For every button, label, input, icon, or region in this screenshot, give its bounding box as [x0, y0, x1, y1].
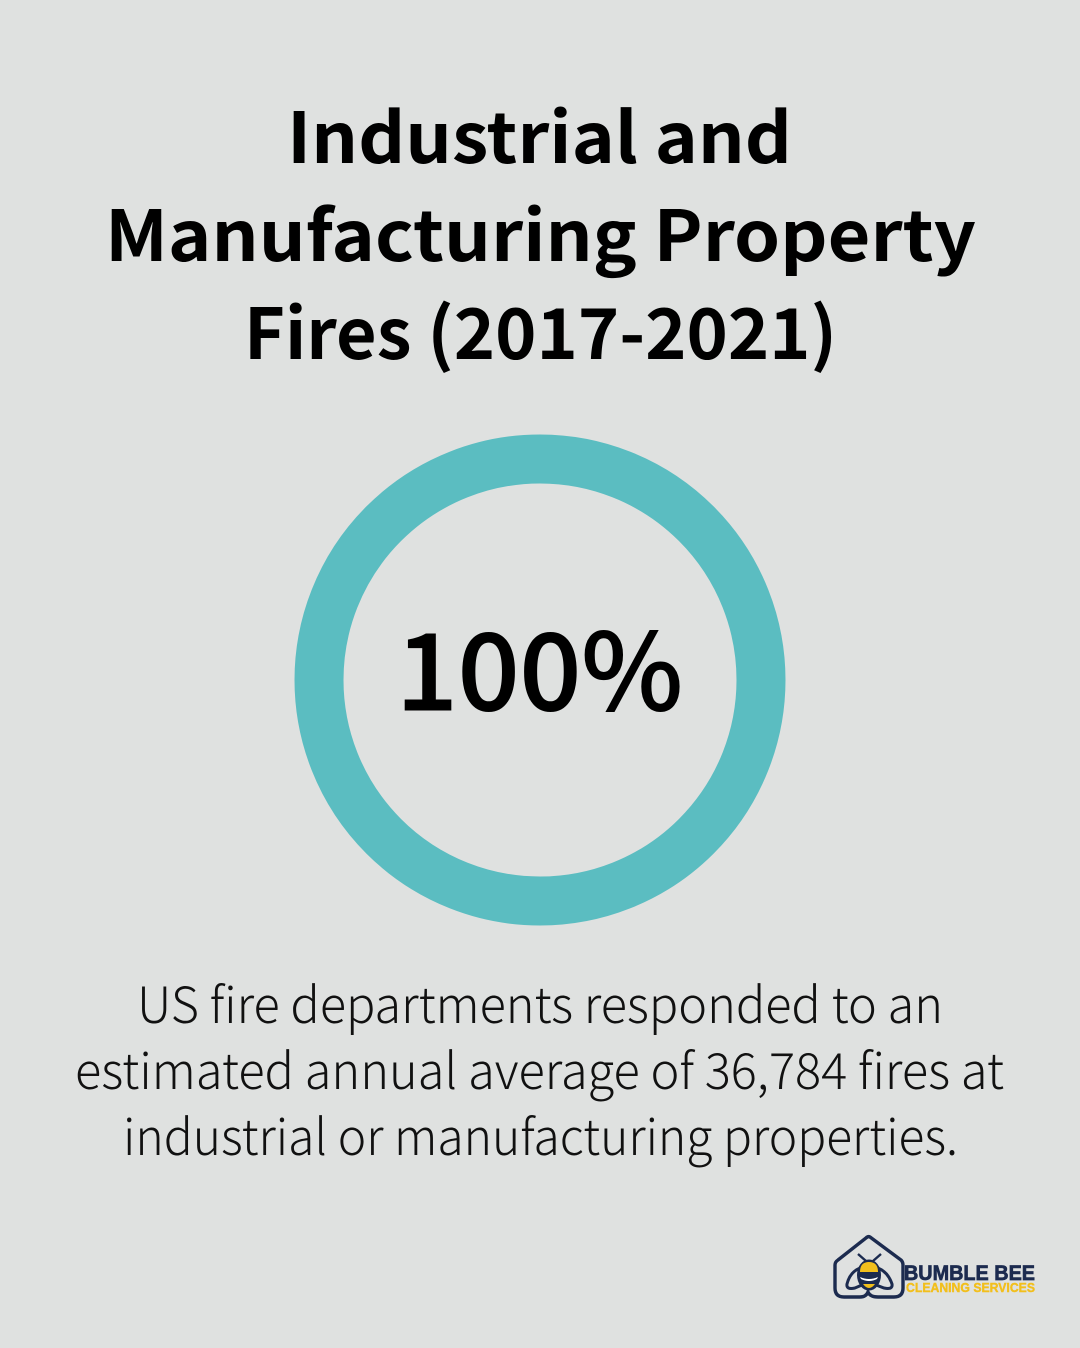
icon: bee — [847, 1254, 892, 1290]
title: Industrial and — [287, 83, 792, 184]
description text — [75, 966, 1004, 1170]
title — [105, 83, 976, 380]
description text: US fire departments responded to an — [137, 966, 943, 1038]
logo name: BUMBLE BEE — [904, 1262, 1035, 1285]
logo tagline: CLEANING SERVICES — [906, 1281, 1035, 1295]
donut chart: 100% — [319, 459, 761, 901]
title: Fires (2017-2021) — [244, 279, 837, 380]
description text: estimated annual average of 36,784 fires at — [75, 1032, 1004, 1104]
donut value: 100% — [396, 587, 683, 741]
logo: Bumble Bee Cleaning Services — [835, 1237, 1035, 1297]
icon: house outline — [835, 1237, 903, 1297]
description text: industrial or manufacturing properties. — [123, 1098, 958, 1170]
title: Manufacturing Property — [105, 181, 976, 282]
